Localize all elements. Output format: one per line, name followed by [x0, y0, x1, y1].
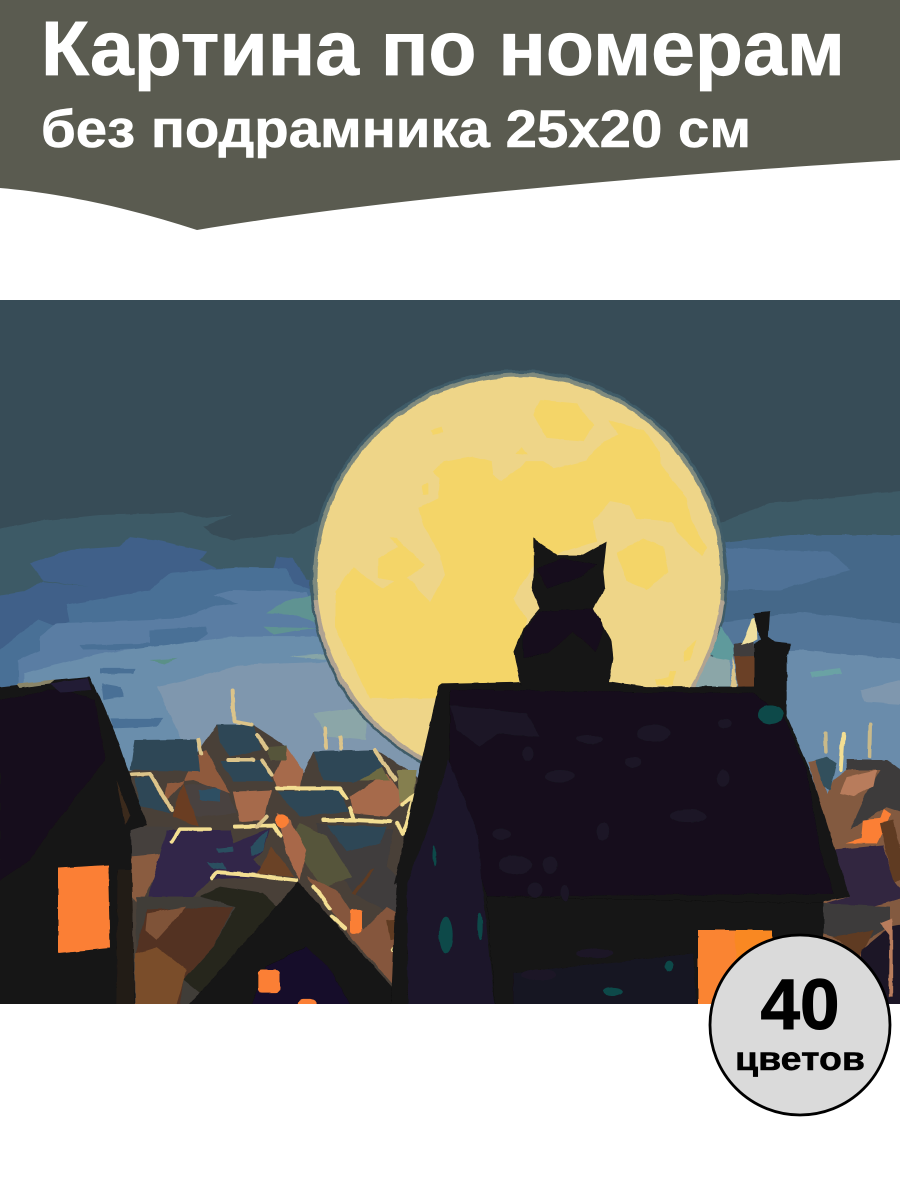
clouds right of moon	[700, 490, 900, 800]
badge: 40 colours	[710, 935, 890, 1115]
distant village roofs	[128, 688, 418, 1004]
header banner	[0, 0, 900, 230]
title: Картина по номерам	[41, 6, 845, 92]
right village	[808, 725, 900, 1023]
cat	[514, 538, 613, 685]
teal moss patches	[433, 705, 783, 996]
front dark house	[189, 882, 392, 1004]
subtitle: без подрамника 25х20 см	[41, 100, 751, 159]
moon	[310, 370, 728, 788]
main house with chimney	[390, 612, 850, 1023]
glowing roof ridges	[172, 788, 415, 950]
roof shingle blotches	[450, 705, 732, 981]
teal village roofs	[130, 725, 387, 852]
lit windows	[275, 814, 362, 933]
main house window	[698, 930, 772, 1004]
clouds left of moon	[0, 512, 420, 778]
badge number: 40	[761, 966, 839, 1045]
moon patches	[335, 400, 707, 698]
left house	[0, 677, 147, 1020]
left window	[58, 865, 110, 953]
badge label: цветов	[735, 1040, 865, 1077]
chimneys and tan ridges	[132, 690, 395, 827]
painting: cat on roof under full moon	[0, 300, 900, 1027]
front house windows	[258, 970, 317, 1004]
